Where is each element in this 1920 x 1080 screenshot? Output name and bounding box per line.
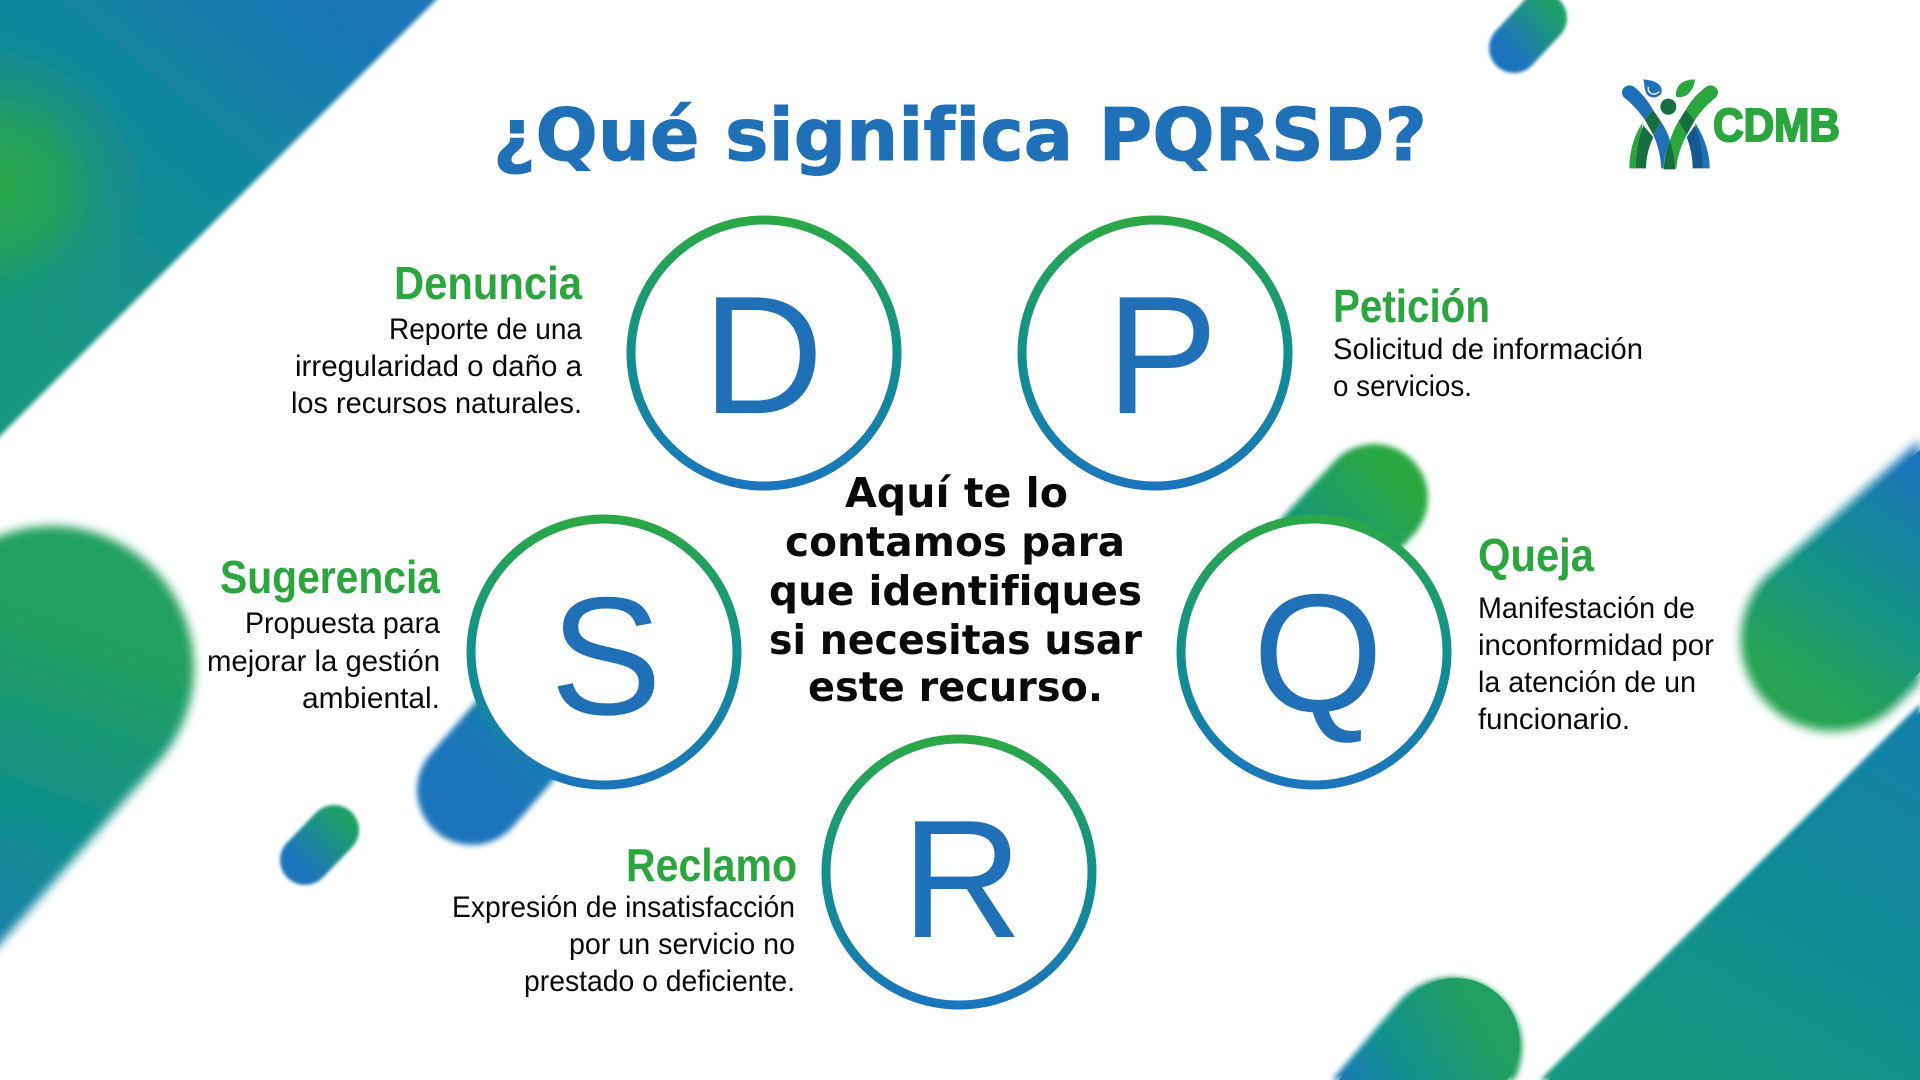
center message: Aquí te lo [845, 469, 1068, 517]
text block: Sugerencia: ambiental. [302, 682, 440, 715]
background: bottom-right diagonal shape [1540, 704, 1920, 1080]
circle D: D [702, 261, 824, 449]
text block: Denuncia: irregularidad o daño a [295, 350, 582, 383]
text block: Reclamo: Reclamo [626, 839, 797, 891]
background: green capsule behind Q [1270, 498, 1374, 610]
text block: Denuncia: Reporte de una [389, 313, 582, 346]
center message: si necesitas usar [769, 616, 1143, 664]
text block: Denuncia: Denuncia [394, 257, 582, 309]
text block: Sugerencia [207, 551, 440, 715]
center message: que identifiques [769, 567, 1142, 615]
text block: Petición [1333, 280, 1643, 403]
text block: Denuncia: los recursos naturales. [291, 387, 582, 420]
text block: Petición: Petición [1333, 280, 1490, 332]
circle S [471, 519, 737, 785]
text block: Reclamo: Expresión de insatisfacción [452, 891, 795, 924]
background: small capsule lower left [305, 830, 334, 860]
circle D [631, 220, 897, 486]
center message [769, 469, 1143, 711]
text block: Queja: inconformidad por [1478, 629, 1714, 662]
center message: este recurso. [808, 663, 1103, 711]
text block: Queja: Manifestación de [1478, 592, 1695, 625]
logo: CDMB [1622, 79, 1840, 169]
text block: Sugerencia: Sugerencia [220, 551, 440, 603]
logo wordmark: CDMB [1713, 99, 1840, 151]
circle Q: Q [1253, 559, 1383, 747]
text block: Denuncia [291, 257, 582, 420]
text block: Queja: Queja [1478, 529, 1594, 581]
text block: Queja [1478, 529, 1714, 736]
text block: Sugerencia: mejorar la gestión [207, 645, 440, 678]
background: blue capsule behind S [472, 620, 620, 790]
background: small capsule top [1514, 18, 1542, 48]
text block: Sugerencia: Propuesta para [245, 607, 440, 640]
logo icon: figure with drop and leaf [1622, 79, 1718, 169]
title: ¿Qué significa PQRSD? [493, 93, 1427, 177]
center message: contamos para [785, 518, 1125, 566]
text block: Petición: o servicios. [1333, 370, 1472, 403]
background: bottom capsule [1332, 977, 1522, 1080]
background: top-left diagonal shape [0, 0, 440, 446]
text block: Reclamo: prestado o deficiente. [524, 965, 795, 998]
background: left large capsule [0, 668, 52, 900]
text block: Queja: funcionario. [1478, 703, 1630, 736]
circle P [1022, 220, 1288, 486]
circle R: R [901, 785, 1023, 973]
circle S: S [550, 562, 662, 750]
text block: Reclamo [452, 839, 797, 998]
background: right capsule [1741, 440, 1920, 731]
text block: Reclamo: por un servicio no [569, 928, 795, 961]
circle R [826, 739, 1092, 1005]
circle Q [1181, 519, 1447, 785]
circle P: P [1106, 261, 1218, 449]
text block: Petición: Solicitud de información [1333, 333, 1643, 366]
text block: Queja: la atención de un [1478, 666, 1696, 699]
